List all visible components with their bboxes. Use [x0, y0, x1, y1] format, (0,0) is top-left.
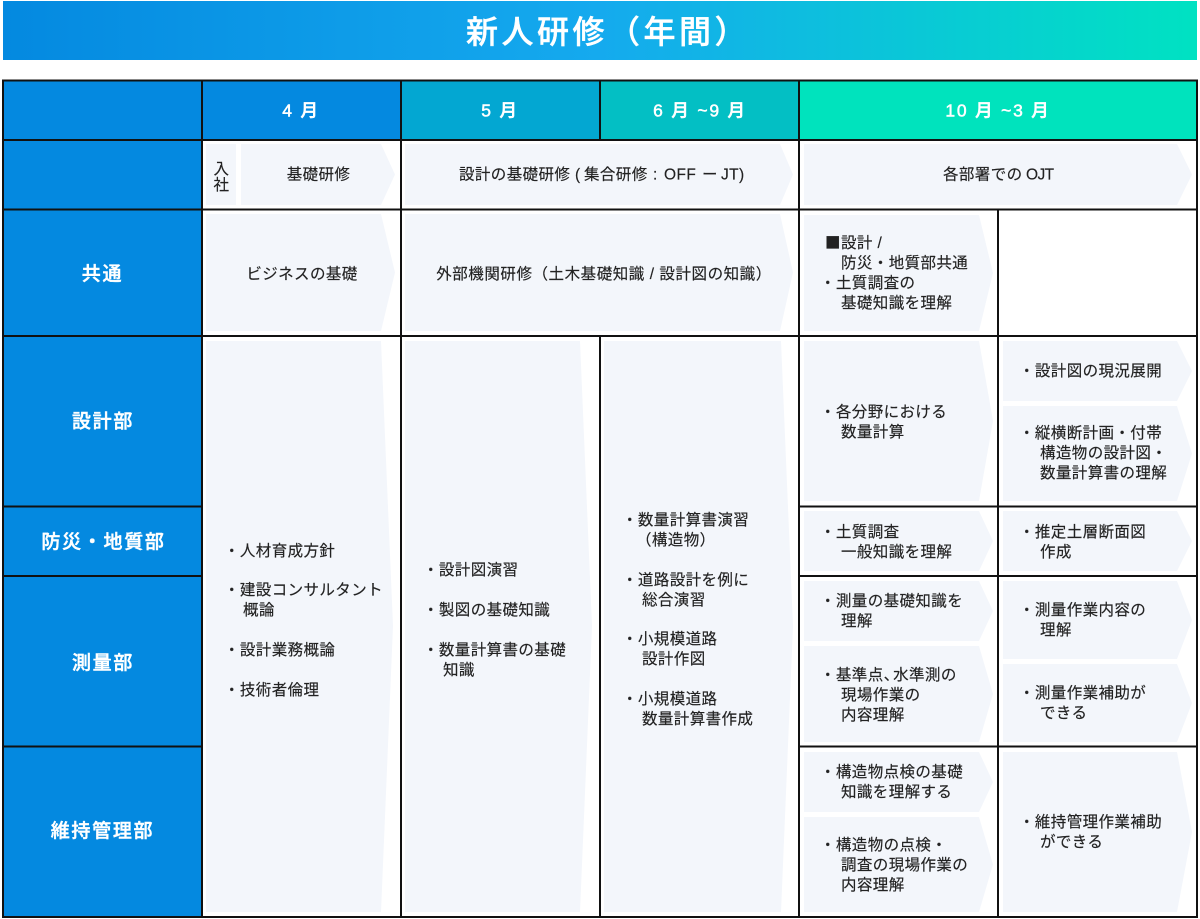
- panel: business basics: [206, 214, 395, 331]
- panel: June to September curriculum: ・数量計算書演習: [622, 510, 749, 529]
- row header: disaster prevention and geology: 防災・地質部: [41, 531, 166, 553]
- panel: benchmark and leveling: 内容理解: [841, 706, 905, 724]
- panel: structure inspection fieldwork: [804, 817, 993, 912]
- panel: June to September curriculum: 総合演習: [642, 591, 706, 609]
- month: June to September: 6 月 ~9 月: [653, 100, 747, 120]
- row header column: [3, 140, 202, 917]
- panel: common design and geology: 防災・地質部共通: [841, 254, 968, 272]
- panel: April curriculum: 概論: [243, 601, 275, 619]
- row header: maintenance: 維持管理部: [51, 820, 154, 842]
- panel: common design and geology: 基礎知識を理解: [841, 294, 952, 312]
- panel: current state of design drawing: [1003, 341, 1192, 401]
- panel: joining the company: [206, 144, 236, 205]
- panel: April curriculum: ・人材育成方針: [224, 542, 335, 560]
- panel: structure inspection fieldwork: ・構造物の点検・: [820, 836, 947, 854]
- panel: design basics group training: (: [575, 166, 581, 184]
- panel: OJT in each department: [804, 144, 1192, 205]
- panel: April curriculum: ・建設コンサルタント: [224, 581, 383, 599]
- panel: soil survey knowledge: [804, 511, 993, 571]
- panel: June to September curriculum: （構造物）: [636, 531, 716, 549]
- panel: May curriculum: ・数量計算書の基礎: [423, 640, 566, 659]
- panel: April curriculum: ・技術者倫理: [224, 681, 319, 699]
- panel: estimated soil cross section: ・推定土層断面図: [1019, 523, 1146, 541]
- panel: basic training: [241, 144, 395, 205]
- panel: structure inspection basics: ・構造物点検の基礎: [820, 763, 963, 781]
- panel: design basics group training: :: [653, 166, 658, 184]
- panel: structural design drawings: [1003, 406, 1192, 501]
- panel: design basics group training: OFF: [664, 166, 696, 184]
- panel: survey work content: [1003, 581, 1192, 659]
- month: October to March: 10 月 ~3 月: [945, 100, 1051, 120]
- panel: survey basics: [804, 581, 993, 641]
- panel: maintenance work assistance: [1003, 752, 1192, 912]
- panel: June to September curriculum: 数量計算書作成: [642, 709, 753, 728]
- panel: structural design drawings: ・縦横断計画・付帯: [1019, 424, 1162, 442]
- panel: quantity calculation by field: [804, 341, 993, 501]
- panel: design basics group training: JT): [721, 166, 745, 184]
- panel: external institution training: 外部機関研修（土木基礎知識 / 設計図の知識）: [436, 265, 772, 283]
- panel: quantity calculation by field: 数量計算: [841, 422, 905, 441]
- panel: design basics group training: 集合研修: [584, 166, 648, 184]
- panel: maintenance work assistance: ができる: [1040, 833, 1103, 851]
- panel: survey work assistance: ・測量作業補助が: [1019, 684, 1146, 702]
- panel: May curriculum: 知識: [443, 661, 475, 679]
- panel: May curriculum: ・製図の基礎知識: [423, 601, 550, 619]
- panel: survey work assistance: [1003, 664, 1192, 742]
- panel: June to September curriculum: [604, 341, 793, 912]
- header row: months: [3, 81, 1197, 140]
- panel: OJT in each department: 各部署での: [943, 166, 1023, 184]
- panel: structural design drawings: 構造物の設計図・: [1040, 444, 1167, 462]
- panel: structure inspection basics: 知識を理解する: [841, 783, 952, 801]
- panel: June to September curriculum: ・小規模道路: [622, 630, 718, 648]
- panel: soil survey knowledge: ・土質調査: [820, 523, 900, 541]
- panel: benchmark and leveling: 現場作業の: [841, 686, 921, 704]
- panel: structure inspection fieldwork: 調査の現場作業の: [841, 856, 968, 874]
- panel: estimated soil cross section: [1003, 511, 1192, 571]
- panel: design basics group training: 設計の基礎研修: [459, 166, 570, 184]
- month: April: 4 月: [282, 100, 320, 120]
- panel: survey work content: 理解: [1040, 621, 1072, 639]
- panel: common design and geology: ・土質調査の: [820, 274, 915, 292]
- panel: May curriculum: [405, 341, 592, 912]
- panel: design basics group training: [405, 144, 793, 205]
- panel: survey work content: ・測量作業内容の: [1019, 601, 1146, 619]
- panel: soil survey knowledge: 一般知識を理解: [841, 543, 952, 561]
- panel: structural design drawings: 数量計算書の理解: [1040, 463, 1167, 482]
- panel: survey basics: 理解: [841, 612, 873, 630]
- panel: June to September curriculum: ・道路設計を例に: [622, 571, 749, 589]
- title banner: [3, 1, 1197, 60]
- panel: benchmark and leveling: [804, 646, 993, 742]
- panel: joining the company: 入: [214, 161, 229, 178]
- panel: estimated soil cross section: 作成: [1040, 543, 1072, 561]
- panel: April curriculum: [206, 341, 393, 912]
- panel: survey basics: ・測量の基礎知識を: [820, 592, 963, 610]
- panel: business basics: ビジネスの基礎: [246, 265, 358, 283]
- panel: common design and geology: 設計 /: [841, 234, 883, 252]
- panel: benchmark and leveling: ・基準点、水準測の: [820, 667, 957, 684]
- month: May: 5 月: [481, 100, 519, 120]
- title: 新人研修（年間）: [466, 14, 750, 50]
- panel: joining the company: 社: [214, 176, 230, 194]
- panel: common design and geology: [804, 215, 993, 331]
- row header: common: 共通: [82, 263, 123, 285]
- panel: April curriculum: ・設計業務概論: [224, 641, 335, 659]
- panel: structure inspection basics: [804, 752, 993, 812]
- panel: OJT in each department: OJT: [1026, 166, 1055, 184]
- panel: maintenance work assistance: ・維持管理作業補助: [1019, 813, 1162, 831]
- panel: basic training: 基礎研修: [287, 166, 350, 184]
- row header: survey: 測量部: [72, 652, 134, 674]
- panel: structure inspection fieldwork: 内容理解: [841, 876, 905, 894]
- panel: common design and geology: ■: [825, 231, 841, 253]
- row header: design: 設計部: [72, 410, 134, 432]
- panel: external institution training: [405, 214, 793, 331]
- panel: design basics group training: ー: [702, 166, 718, 184]
- panel: quantity calculation by field: ・各分野における: [820, 403, 947, 421]
- panel: June to September curriculum: ・小規模道路: [622, 690, 718, 708]
- panel: current state of design drawing: ・設計図の現況展開: [1019, 362, 1162, 380]
- panel: May curriculum: ・設計図演習: [423, 561, 518, 579]
- panel: June to September curriculum: 設計作図: [642, 650, 706, 668]
- panel: survey work assistance: できる: [1040, 704, 1087, 722]
